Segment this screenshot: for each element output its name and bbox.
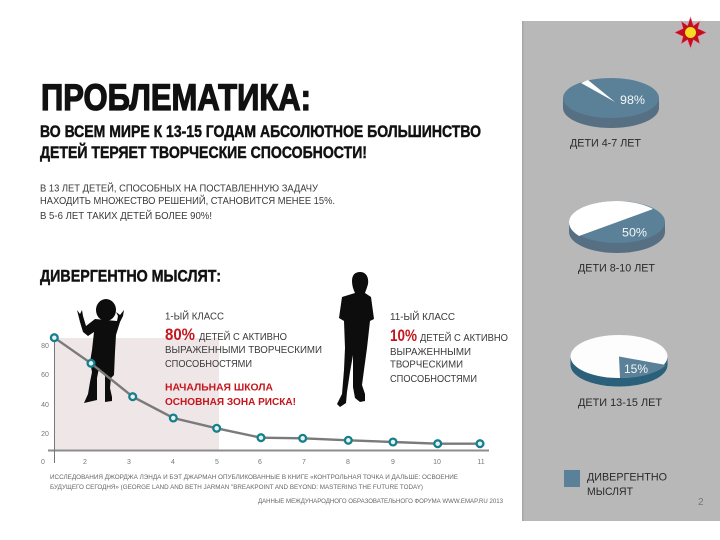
footnote: БУДУЩЕГО СЕГОДНЯ» (GEORGE LAND AND BETH JARMAN "BREAKPOINT AND BEYOND: MASTERING THE FUTURE TODAY) [50, 484, 423, 491]
footnote: ДАННЫЕ МЕЖДУНАРОДНОГО ОБРАЗОВАТЕЛЬНОГО ФОРУМА WWW.EMAP.RU 2013 [258, 498, 503, 505]
text block: eleventh grade: 11-ЫЙ КЛАСС [390, 310, 455, 323]
text block: first grade [165, 310, 322, 370]
data points [51, 334, 483, 447]
axis labels: 7 [302, 459, 306, 466]
icon: red star [674, 17, 706, 48]
title: ПРОБЛЕМАТИКА: [41, 77, 311, 118]
axis labels: 9 [391, 459, 395, 466]
text block: intro: НАХОДИТЬ МНОЖЕСТВО РЕШЕНИЙ, СТАНОВИТСЯ МЕНЕЕ 15%. [40, 194, 335, 207]
axis labels: 4 [171, 459, 175, 466]
pie chart: ages 4-7: 98% [620, 93, 645, 107]
pie chart: ages 8-10 [569, 201, 665, 253]
pie chart: ages 13-15: 15% [624, 362, 648, 376]
axis labels: 2 [83, 459, 87, 466]
footnote [50, 474, 503, 505]
axis labels: 6 [258, 459, 262, 466]
callout: primary school risk [165, 382, 296, 408]
callout: primary school risk: НАЧАЛЬНАЯ ШКОЛА [165, 382, 273, 394]
legend: ДИВЕРГЕНТНО [587, 472, 667, 484]
label: ages 8-10: ДЕТИ 8-10 ЛЕТ [578, 262, 655, 274]
text block: eleventh grade: ДЕТЕЙ С АКТИВНО [420, 331, 508, 344]
legend [564, 470, 667, 498]
axis labels: 60 [41, 372, 49, 379]
text block: first grade: ВЫРАЖЕННЫМИ ТВОРЧЕСКИМИ [165, 344, 322, 356]
line chart [41, 299, 489, 466]
axis labels: 5 [215, 459, 219, 466]
footnote: ИССЛЕДОВАНИЯ ДЖОРДЖА ЛЭНДА И БЭТ ДЖАРМАН ОПУБЛИКОВАННЫЕ В КНИГЕ «КОНТРОЛЬНАЯ ТОЧКА И ДАЛЬШЕ: ОСВОЕНИЕ [50, 474, 459, 481]
callout: primary school risk: ОСНОВНАЯ ЗОНА РИСКА! [165, 396, 296, 408]
axis labels: 8 [346, 459, 350, 466]
subtitle [40, 123, 481, 162]
text block: intro: В 13 ЛЕТ ДЕТЕЙ, СПОСОБНЫХ НА ПОСТАВЛЕННУЮ ЗАДАЧУ [40, 182, 318, 194]
text block: eleventh grade [390, 310, 508, 385]
label: ages 4-7: ДЕТИ 4-7 ЛЕТ [570, 138, 641, 150]
axis labels: 80 [41, 343, 49, 350]
axis labels: 11 [477, 459, 485, 466]
icon: teen silhouette [337, 272, 374, 407]
text block: first grade: 1-ЫЙ КЛАСС [165, 310, 224, 322]
icon: child silhouette [77, 299, 124, 403]
pie chart: ages 4-7 [563, 78, 659, 128]
text block: first grade: 80% [165, 326, 195, 344]
text block: eleventh grade: 10% [390, 327, 417, 345]
text block: eleventh grade: ВЫРАЖЕННЫМИ [390, 346, 471, 358]
subtitle: ВО ВСЕМ МИРЕ К 13-15 ГОДАМ АБСОЛЮТНОЕ БОЛЬШИНСТВО [40, 123, 481, 141]
axis labels: 40 [41, 402, 49, 409]
text block: eleventh grade: СПОСОБНОСТЯМИ [390, 373, 477, 385]
axis labels: 20 [41, 431, 49, 438]
heading: divergent thinking: ДИВЕРГЕНТНО МЫСЛЯТ: [40, 266, 221, 286]
axis labels [41, 343, 485, 466]
axis labels: 3 [127, 459, 131, 466]
legend: МЫСЛЯТ [587, 486, 633, 498]
subtitle: ДЕТЕЙ ТЕРЯЕТ ТВОРЧЕСКИЕ СПОСОБНОСТИ! [40, 143, 367, 162]
text block: first grade: ДЕТЕЙ С АКТИВНО [199, 330, 287, 343]
page number: 2 [698, 497, 704, 508]
text block: intro [40, 182, 335, 222]
axis labels: 0 [41, 459, 45, 466]
axis labels: 10 [433, 459, 441, 466]
label: ages 13-15: ДЕТИ 13-15 ЛЕТ [578, 397, 662, 409]
pie chart: ages 13-15 [570, 335, 668, 386]
pie chart: ages 8-10: 50% [622, 226, 647, 240]
text block: eleventh grade: ТВОРЧЕСКИМИ [390, 358, 463, 370]
text block: first grade: СПОСОБНОСТЯМИ [165, 358, 252, 370]
text block: intro: В 5-6 ЛЕТ ТАКИХ ДЕТЕЙ БОЛЕЕ 90%! [40, 209, 212, 222]
panel: right sidebar [522, 21, 720, 521]
